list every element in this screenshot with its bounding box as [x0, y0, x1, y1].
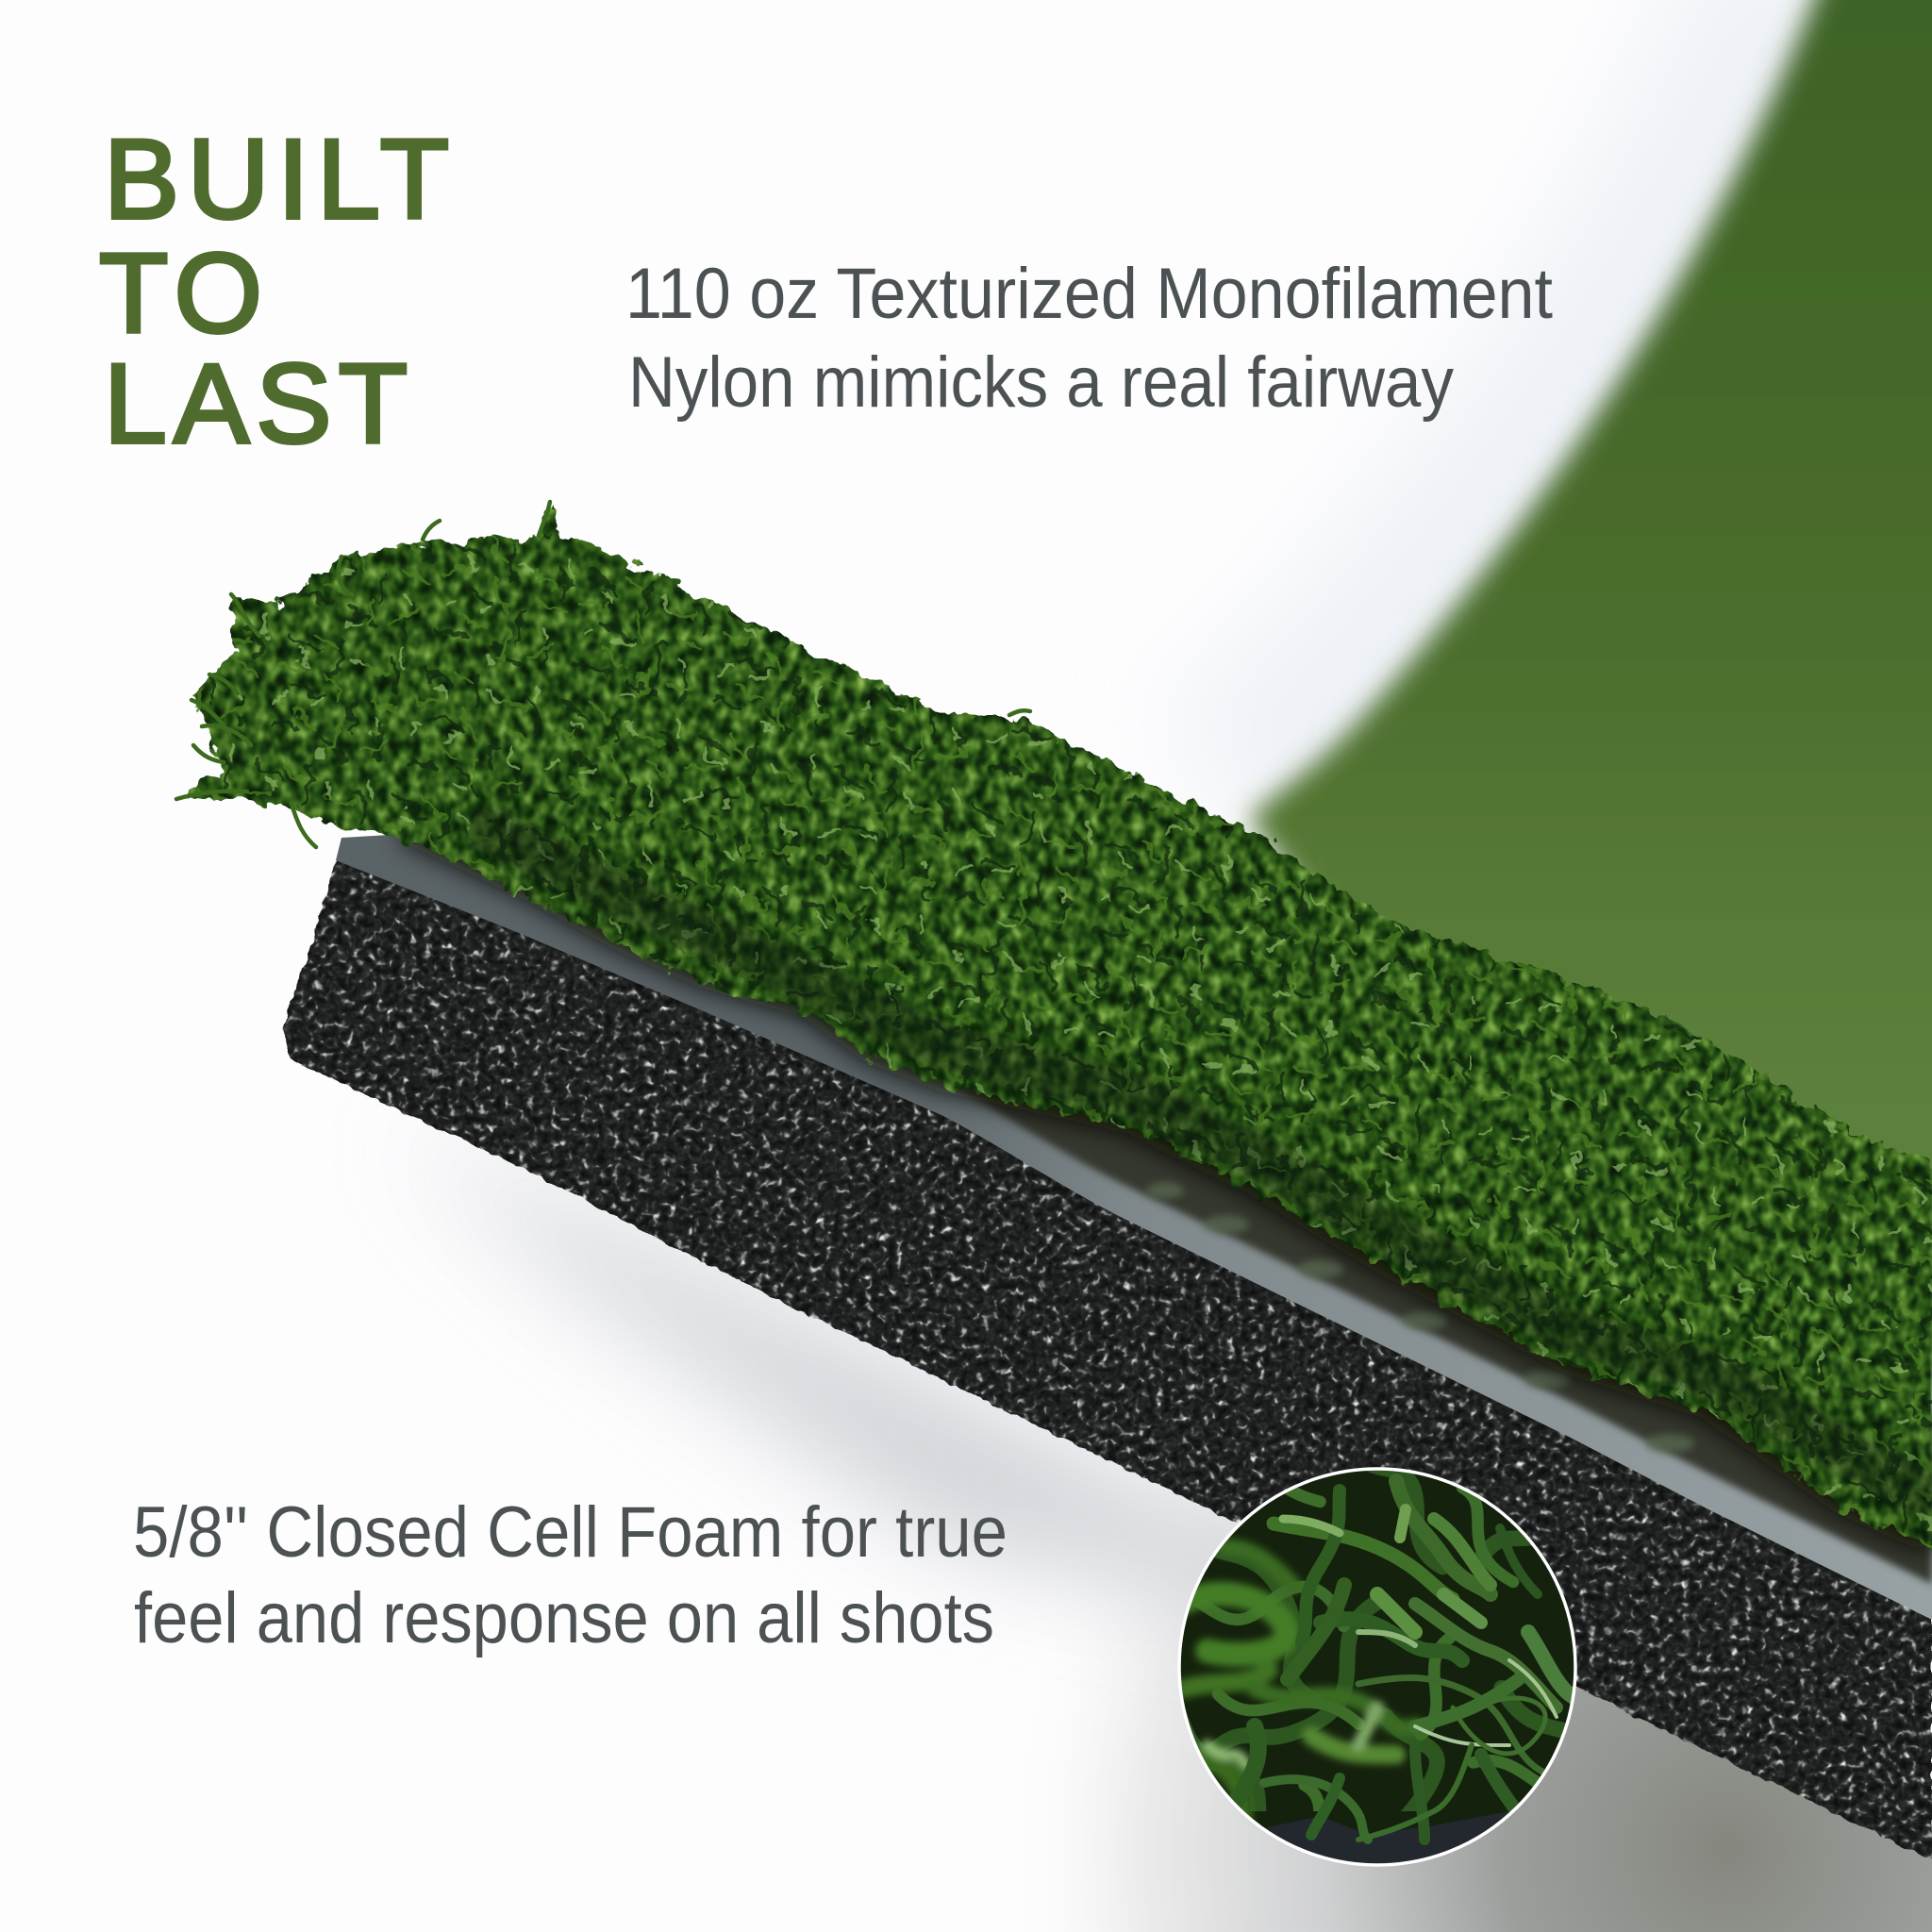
stray turf fibres	[176, 502, 1538, 977]
text: monofilament description: 110 oz Texturized Monofilament	[625, 254, 1553, 334]
sharp strands in inset	[1236, 1481, 1585, 1840]
product: turf mat	[176, 502, 1932, 1860]
title	[99, 116, 449, 467]
text: foam description: feel and response on all shots	[134, 1578, 994, 1658]
bluish glow beside green field	[1249, 0, 1835, 818]
strand texture	[178, 505, 1932, 1557]
filler strands in inset	[1185, 1470, 1566, 1811]
turf grass	[178, 505, 1932, 1557]
text: monofilament description: Nylon mimicks a real fairway	[628, 342, 1454, 423]
inset: turf close-up circle	[1170, 1462, 1585, 1877]
lower grass shade	[472, 821, 1932, 1500]
title: TO	[99, 230, 262, 357]
dark mottled band on strip	[953, 1085, 1932, 1584]
title: BUILT	[104, 116, 449, 242]
shadow under mat	[396, 1123, 1321, 1623]
title: LAST	[104, 341, 408, 467]
text: foam description	[133, 1492, 1008, 1658]
foam base in inset	[1265, 1811, 1509, 1864]
moss patches on strip	[1146, 1182, 1694, 1453]
blurred green field	[1249, 0, 1932, 1415]
grey floor gradient at bottom right	[849, 1340, 1932, 1932]
root shadow under grass	[406, 825, 1932, 1538]
white ring	[1179, 1469, 1575, 1865]
text: foam description: 5/8'' Closed Cell Foam for true	[133, 1492, 1008, 1573]
text: monofilament description	[625, 254, 1553, 423]
blurred strands on left of inset	[1179, 1547, 1415, 1830]
grey backing strip	[336, 830, 1932, 1620]
foam layer	[283, 860, 1932, 1860]
